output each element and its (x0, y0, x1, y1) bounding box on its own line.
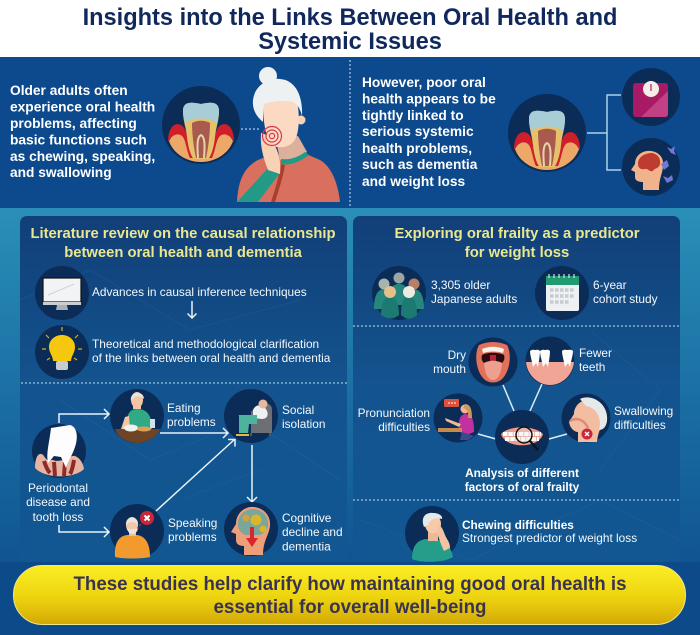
text: poor oral health: health problems, (362, 141, 472, 156)
callout: conclusion banner: essential for overall well-being (214, 596, 486, 618)
text: periodontal disease: tooth loss (33, 510, 83, 524)
icon: group of older adults (372, 266, 426, 320)
text: dry mouth (433, 348, 466, 376)
panel: systemic links (362, 68, 680, 196)
text: clarification (92, 337, 331, 365)
text: participants (431, 278, 517, 306)
arrow (188, 301, 196, 318)
text: analysis: Analysis of different (465, 466, 579, 480)
text: participants: Japanese adults (431, 292, 517, 306)
text: poor oral health: However, poor oral (362, 75, 486, 90)
text: pronunciation difficulties (358, 406, 430, 434)
text: social isolation: Social (282, 403, 314, 417)
text: chewing difficulties: Strongest predictor of weight loss (462, 531, 637, 545)
text: poor oral health: such as dementia (362, 157, 478, 172)
background (0, 208, 700, 635)
text: speaking problems: problems (168, 530, 217, 544)
dotted pointer (241, 128, 260, 130)
text: swallowing difficulties: difficulties (614, 418, 666, 432)
text: eating problems: problems (167, 415, 216, 429)
text: cohort study (593, 278, 658, 306)
text: chewing difficulties: Chewing difficulties (462, 518, 574, 532)
text: cohort study: cohort study (593, 292, 658, 306)
text: chewing difficulties (462, 518, 637, 545)
text: poor oral health: serious systemic (362, 124, 474, 139)
text: analysis: factors of oral frailty (465, 480, 580, 494)
text: older adults: and swallowing (10, 165, 112, 180)
connector lines to oral frailty hub (478, 384, 567, 439)
text: dry mouth: Dry (448, 348, 466, 362)
text: swallowing difficulties: Swallowing (614, 404, 673, 418)
text: periodontal disease: Periodontal (28, 481, 88, 495)
heading: for weight loss (465, 245, 569, 261)
icon: teeth under magnifier (495, 410, 549, 464)
text: cognitive decline: dementia (282, 540, 331, 554)
text: dry mouth: mouth (433, 362, 466, 376)
icon: head with brain fragments (622, 138, 680, 196)
text: analysis (465, 466, 580, 494)
icon: speaking problems (110, 504, 164, 558)
panel: oral frailty (353, 216, 680, 566)
text: cohort study: 6-year (593, 278, 627, 292)
text: cognitive decline: decline and (282, 525, 343, 539)
heading (394, 226, 640, 261)
text: fewer teeth (579, 346, 612, 374)
text: social isolation (282, 403, 325, 431)
icon: tooth loss (32, 424, 86, 478)
text: cognitive decline (282, 511, 343, 554)
text: periodontal disease: disease and (26, 495, 90, 509)
heading (30, 226, 336, 261)
faint network pattern (20, 270, 340, 500)
text: fewer teeth: teeth (579, 360, 605, 374)
text: poor oral health: and weight loss (362, 174, 465, 189)
text: older adults: basic functions such (10, 132, 147, 148)
icon: eating (110, 389, 164, 443)
title: Insights into the Links Between Oral Health and (83, 5, 617, 31)
text: poor oral health: tightly linked to (362, 108, 464, 123)
text: periodontal disease (26, 481, 90, 524)
arrow: tooth to eating (59, 409, 109, 423)
text: clarification: of the links between oral health and dementia (92, 351, 331, 365)
text: speaking problems (168, 516, 217, 544)
icon: older woman with tooth pain (237, 67, 340, 202)
faint network pattern (360, 330, 680, 560)
text: pronunciation difficulties: difficulties (378, 420, 430, 434)
divider (349, 60, 351, 206)
text: poor oral health: health appears to be (362, 92, 496, 106)
callout: conclusion banner: These studies help clarify how maintaining good oral health is (74, 573, 627, 595)
heading: between oral health and dementia (64, 245, 303, 261)
callout: conclusion banner (14, 566, 686, 624)
arrow: speaking to social isolation (156, 439, 235, 511)
text: swallowing difficulties (614, 404, 673, 432)
arrow: eating to social isolation (160, 428, 228, 438)
text: clarification: Theoretical and methodological clarification (92, 337, 319, 351)
text: participants: 3,305 older (431, 278, 490, 292)
panel: literature review (20, 216, 347, 566)
text: older adults (10, 83, 155, 180)
text: older adults: as chewing, speaking, (10, 149, 155, 164)
text: fewer teeth: Fewer (579, 346, 612, 360)
icon: pronunciation difficulties (434, 394, 482, 442)
text: older adults: problems, affecting (10, 116, 137, 131)
icon: swallowing difficulties (562, 394, 610, 442)
icon: calendar (535, 266, 589, 320)
text: older adults: experience oral health (10, 100, 155, 114)
icon: fewer teeth (526, 336, 574, 386)
icon: cognitive decline (224, 502, 278, 556)
icon: chewing difficulties (405, 506, 459, 562)
icon: tooth with gum disease (162, 86, 240, 164)
panel: older adults intro (10, 67, 340, 202)
icon: dry mouth (468, 338, 518, 386)
bottom strip (0, 562, 700, 635)
text: poor oral health (362, 75, 496, 189)
text: speaking problems: Speaking (168, 516, 217, 530)
heading: Exploring oral frailty as a predictor (394, 226, 640, 242)
icon: monitor (35, 266, 89, 320)
text: older adults: Older adults often (10, 83, 128, 98)
heading: Literature review on the causal relationship (30, 226, 336, 242)
arrow: tooth to speaking (59, 525, 109, 537)
text: social isolation: isolation (282, 417, 325, 431)
icon: tooth (508, 94, 586, 172)
title (83, 5, 617, 55)
connector (587, 95, 621, 170)
icon: light bulb (35, 325, 89, 379)
icon: weighing scale (622, 68, 680, 126)
arrow: social isolation to cognitive decline (247, 445, 257, 502)
icon: social isolation (224, 389, 278, 443)
text: pronunciation difficulties: Pronunciation (358, 406, 430, 420)
text: eating problems: Eating (167, 401, 201, 415)
text: causal inference: Advances in causal inference techniques (92, 285, 307, 299)
title: Systemic Issues (258, 29, 442, 55)
text: eating problems (167, 401, 216, 429)
text: cognitive decline: Cognitive (282, 511, 332, 525)
